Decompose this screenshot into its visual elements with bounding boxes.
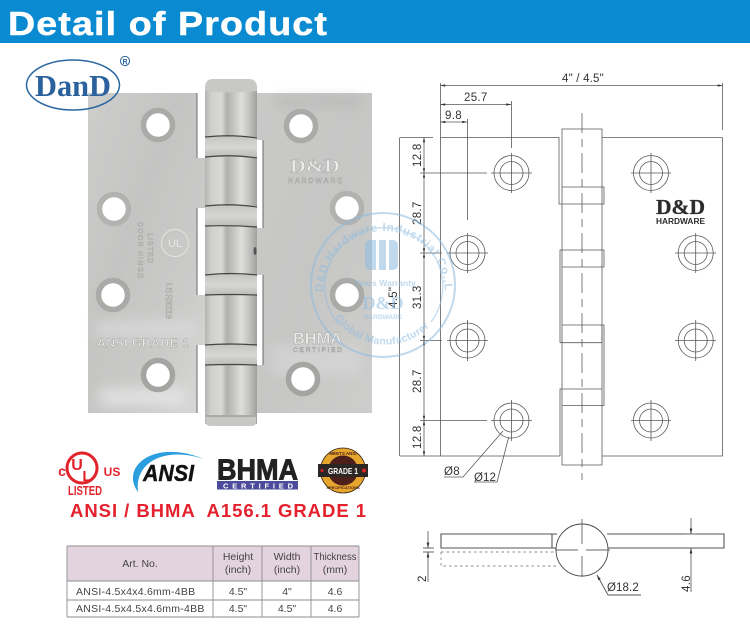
certification logo: ANSI: ANSI: [142, 460, 195, 486]
knuckle outline: [562, 129, 602, 465]
certification logo: BHMA certified: BHMA: [217, 454, 298, 486]
drawing dimension labels: Ø8: [444, 466, 460, 478]
specification table: ANSI-4.5x4x4.6mm-4BB: [76, 586, 195, 598]
hinge leaf slots: [197, 93, 263, 413]
drawing dimension labels: 4.5": [388, 287, 400, 308]
certification logo: ANSI: [133, 452, 204, 492]
hinge knuckle barrel: [205, 86, 257, 424]
engraved marks: [97, 156, 342, 354]
specification table: 4.5": [278, 603, 296, 615]
certification badge: grade 1: SPECIFICATIONS: [326, 485, 360, 490]
diameter leaders: [444, 431, 503, 477]
certification badge: grade 1: [318, 448, 368, 493]
specification table: (mm): [323, 564, 347, 576]
drawing dimension labels: 12.8: [412, 425, 424, 449]
drawing dimension labels: 28.7: [412, 201, 424, 225]
certification badge: grade 1: MEETS ANSI: [329, 451, 357, 456]
end view labels: 2: [417, 576, 429, 582]
title banner: [0, 0, 750, 43]
specification table: (inch): [274, 564, 300, 576]
watermark stamp: [310, 212, 456, 358]
specification table: Height: [223, 551, 253, 563]
product photo: door hinge: [88, 79, 372, 426]
drawing dimension labels: 28.7: [412, 369, 424, 393]
certification logo: UL listed: US: [104, 465, 120, 479]
thickness dimensions: [423, 518, 696, 592]
specification table: 4": [282, 586, 292, 598]
title banner: Detail of Product: [8, 5, 328, 42]
end view labels: [417, 575, 693, 594]
brand logo: DanD: DanD: [35, 68, 111, 103]
right hinge leaf: [257, 93, 372, 413]
brand logo: DanD: R: [122, 59, 128, 66]
certification logo: BHMA certified: CERTIFIED: [223, 482, 294, 490]
technical drawing: end view: [423, 518, 724, 595]
product photo: door hinge: UL: [168, 238, 182, 250]
hinge leaf holes: [98, 110, 362, 394]
engraved marks: HARDWARE: [288, 178, 342, 185]
screw holes: [447, 153, 716, 441]
drawing dimension labels: 4" / 4.5": [562, 73, 604, 85]
specification table: Width: [274, 551, 301, 563]
drawing logo: D&D Hardware: D&D: [656, 195, 705, 219]
certification logo: UL listed: LISTED: [68, 483, 102, 498]
watermark stamp: D&D: [362, 293, 404, 313]
specification table: Art. No.: [122, 558, 158, 570]
drawing dimension labels: 12.8: [412, 143, 424, 167]
drawing dimension labels: [388, 73, 604, 484]
brand logo: DanD: [26, 56, 130, 110]
end view labels: 4.6: [681, 575, 693, 592]
specification table: 4.5": [229, 586, 247, 598]
certification logo: UL listed: U: [71, 457, 83, 474]
engraved marks: LISTED: [146, 233, 153, 263]
certification logo: UL listed: [58, 453, 120, 498]
left hinge leaf: [88, 93, 205, 413]
knuckle rings: [205, 137, 257, 365]
technical drawing: front view: [400, 83, 722, 482]
knuckle centre line: [581, 113, 583, 480]
drawing dimension labels: 9.8: [445, 110, 462, 122]
specification table: ANSI-4.5x4.5x4.6mm-4BB: [76, 603, 205, 615]
watermark stamp: HARDWARE: [364, 314, 403, 321]
specification table: 4.5": [229, 603, 247, 615]
dimension lines: [440, 84, 722, 86]
engraved marks: CERTIFIED: [293, 347, 342, 354]
watermark stamp: Years Warranty: [354, 278, 416, 288]
specification table: 4.6: [328, 603, 342, 615]
engraved marks: US R30018: [164, 283, 173, 320]
specification table: Thickness: [314, 551, 356, 563]
drawing dimension labels: 25.7: [464, 92, 488, 104]
certification logo: UL listed: c: [58, 463, 66, 479]
certification logo: UL listed: L: [82, 468, 92, 485]
specification table: [67, 546, 359, 617]
engraved marks: BHMA: [293, 329, 342, 348]
certification badge: grade 1: GRADE 1: [328, 466, 358, 476]
specification table: (inch): [225, 564, 251, 576]
engraved marks: DOOR HINGE: [136, 222, 143, 278]
end view labels: Ø18.2: [607, 582, 639, 594]
drawing dimension labels: Ø12: [474, 472, 496, 484]
engraved marks: D&D: [290, 156, 340, 176]
standard heading: ANSI / BHMA A156.1 GRADE 1: [70, 500, 366, 521]
knuckle ring shadow lines: [205, 136, 257, 365]
hinge plates outline: [400, 83, 722, 456]
engraved marks: ANSI GRADE 1: [97, 336, 189, 350]
drawing dimension labels: 31.3: [412, 285, 424, 309]
drawing logo: D&D Hardware: HARDWARE: [656, 217, 706, 226]
watermark stamp: Global Manufacturer: [336, 315, 428, 345]
specification table: 4.6: [328, 586, 342, 598]
